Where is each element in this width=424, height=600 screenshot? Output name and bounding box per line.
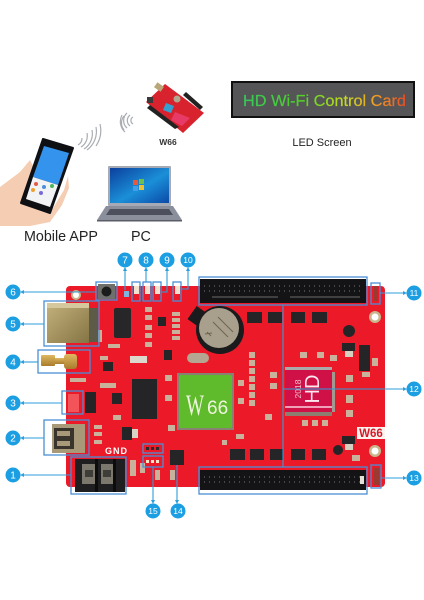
component: coin battery xyxy=(187,306,244,354)
callout 7 xyxy=(118,252,132,290)
component: terminal block xyxy=(75,459,125,492)
callout 10: 10 xyxy=(183,255,193,265)
callout 6 xyxy=(6,284,96,300)
callout 15: 15 xyxy=(148,506,158,516)
label: PC: PC xyxy=(131,229,151,245)
component: RJ45 network jack xyxy=(47,303,98,343)
callout 5: 5 xyxy=(10,320,16,330)
label: W66: W66 xyxy=(159,137,177,147)
component: bottom connector xyxy=(200,470,366,490)
callout 8 xyxy=(138,252,154,282)
callout 3: 3 xyxy=(10,398,16,410)
callout 14 xyxy=(170,465,186,518)
icon: wifi waves near board xyxy=(120,113,133,132)
icon: W66 small board xyxy=(146,82,204,133)
label: LED Screen: LED Screen xyxy=(292,137,352,149)
callout 1: 1 xyxy=(10,470,16,482)
callout 9 xyxy=(160,252,174,292)
component: transformer xyxy=(114,308,131,338)
label: Mobile APP: Mobile APP xyxy=(24,229,98,245)
callout 13 xyxy=(381,470,422,486)
highlight boxes xyxy=(38,277,381,494)
callout 4: 4 xyxy=(10,358,16,368)
callout 5 xyxy=(6,316,44,332)
component: chips xyxy=(85,312,370,465)
component: HD chip: HD xyxy=(302,375,324,403)
callout 11 xyxy=(380,286,422,300)
callout 11: 11 xyxy=(410,288,419,298)
board base xyxy=(66,286,385,487)
component: JST connector xyxy=(68,394,79,412)
component: small crystal xyxy=(130,356,147,363)
small components xyxy=(70,307,378,480)
label: W66 silkscreen: W66 xyxy=(359,428,383,440)
panel: LED screen sign xyxy=(232,82,414,117)
callout 9: 9 xyxy=(164,256,170,266)
callout 15 xyxy=(146,467,160,518)
component: crystal xyxy=(187,353,209,363)
callout 3 xyxy=(6,396,62,410)
mounting holes xyxy=(71,290,381,457)
callout 2 xyxy=(6,430,44,446)
component: side headers xyxy=(374,286,379,485)
callout 10 xyxy=(180,252,196,289)
callout 8: 8 xyxy=(143,256,149,266)
callout 13: 13 xyxy=(409,473,419,483)
component: status LEDs xyxy=(124,286,180,297)
component: W66 main chip: 66 xyxy=(207,398,228,419)
callout 14: 14 xyxy=(173,506,183,516)
component: W66 main chip xyxy=(177,373,234,430)
callout 4 xyxy=(6,354,38,370)
component: top connector xyxy=(200,279,366,303)
component: USB port xyxy=(52,424,85,453)
component: HD chip xyxy=(285,367,335,416)
icon: hand holding phone xyxy=(0,139,73,226)
icon: laptop xyxy=(97,166,182,222)
panel: W66 circuit board xyxy=(38,277,385,494)
callout 2: 2 xyxy=(10,434,16,444)
component: W66 main chip: W xyxy=(186,389,204,422)
callout 12: 12 xyxy=(409,384,419,394)
label: GND: GND xyxy=(105,446,128,456)
callout 6: 6 xyxy=(10,288,16,298)
component: reset button xyxy=(98,284,115,299)
callout 7: 7 xyxy=(122,256,128,266)
LED screen text: HD Wi-Fi Control Card xyxy=(243,93,406,110)
component: jumpers 15 xyxy=(146,447,159,463)
icon: wifi waves near phone xyxy=(78,124,101,150)
component: HD chip: 2018 xyxy=(293,379,303,398)
callout 12 xyxy=(283,305,422,467)
callout 1 xyxy=(6,468,71,482)
component: SMA antenna connector xyxy=(41,354,77,369)
